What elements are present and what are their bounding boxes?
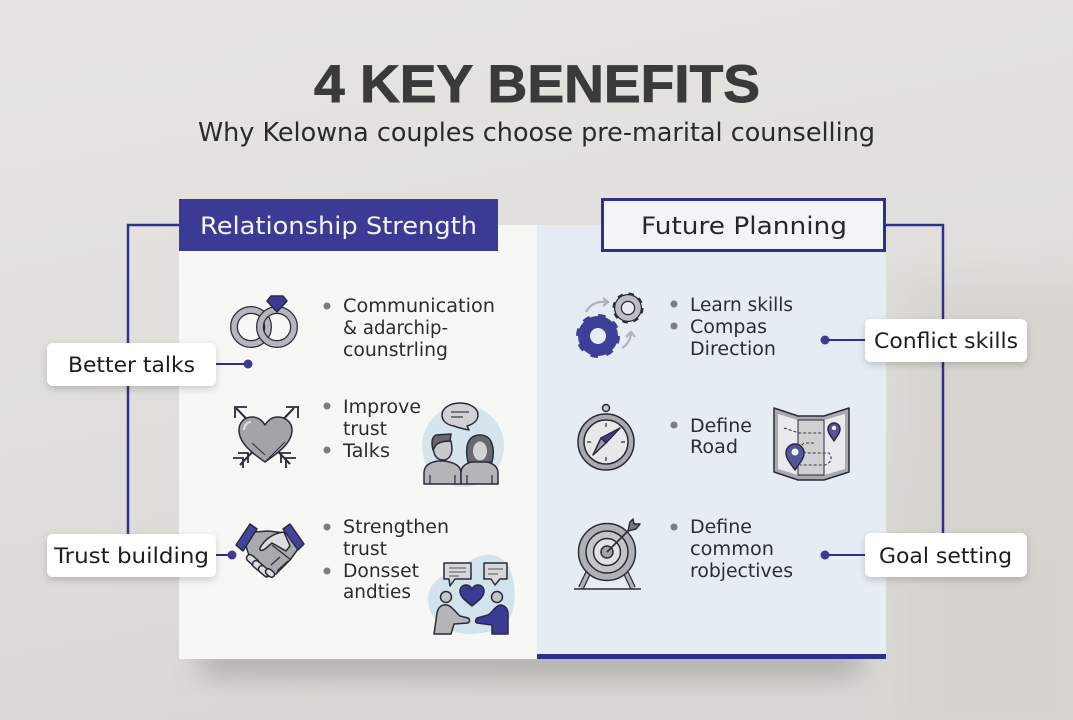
title: 4 KEY BENEFITS <box>314 55 760 114</box>
icon: compass <box>578 404 634 470</box>
panel: relationship strength <box>179 199 537 659</box>
text: improve trust: Talks <box>342 441 390 462</box>
accent bar <box>537 654 886 659</box>
panel: future planning <box>537 200 886 659</box>
text: communication <box>324 296 495 361</box>
callout: trust building: Trust building <box>53 544 209 569</box>
subtitle: Why Kelowna couples choose pre-marital counselling <box>198 118 875 148</box>
text: improve trust: Improve <box>343 397 421 418</box>
text: learn skills: Compas <box>690 317 767 338</box>
icon: gears <box>579 295 641 355</box>
icon: heart with arrows <box>233 407 298 468</box>
heading: relationship strength: Relationship Strength <box>200 212 477 240</box>
text: strengthen trust: Strengthen <box>343 517 449 538</box>
text: define road: Define <box>690 416 752 437</box>
text: define objectives: common <box>690 539 774 560</box>
callout: conflict skills: Conflict skills <box>874 329 1018 354</box>
callout: conflict skills <box>820 319 1027 362</box>
callout: better talks <box>47 343 252 386</box>
text: communication: & adarchip- <box>343 318 448 339</box>
text: define objectives <box>670 517 793 582</box>
callout: trust building <box>47 534 236 577</box>
text: learn skills <box>670 295 793 360</box>
icon: wedding rings <box>234 296 294 344</box>
heading: future planning: Future Planning <box>641 212 847 240</box>
heading: relationship strength <box>179 199 498 251</box>
heading: future planning <box>602 200 884 250</box>
icon: handshake <box>236 524 304 579</box>
callout: goal setting <box>820 533 1027 577</box>
callout: goal setting: Goal setting <box>879 544 1012 569</box>
connector: right bracket <box>885 225 943 535</box>
icon: map <box>774 408 849 480</box>
text: strengthen trust: andties <box>343 582 411 603</box>
text: learn skills: Learn skills <box>690 295 793 316</box>
text: improve trust <box>324 397 421 462</box>
text: define objectives: Define <box>690 517 752 538</box>
icon: couple with heart <box>428 555 515 634</box>
text: define objectives: robjectives <box>690 561 793 582</box>
icon: target <box>574 519 641 589</box>
text: define road <box>670 416 752 458</box>
icon: couple talking <box>422 403 504 487</box>
text: strengthen trust: Donsset <box>343 561 419 582</box>
text: improve trust: trust <box>343 419 387 440</box>
text: communication: Communication <box>343 296 495 317</box>
text: strengthen trust: trust <box>343 539 387 560</box>
text: define road: Road <box>690 437 738 458</box>
text: learn skills: Direction <box>690 339 776 360</box>
text: communication: counstrling <box>343 340 448 361</box>
connector: left bracket <box>128 225 180 540</box>
callout: better talks: Better talks <box>68 353 195 378</box>
text: strengthen trust <box>324 517 449 603</box>
